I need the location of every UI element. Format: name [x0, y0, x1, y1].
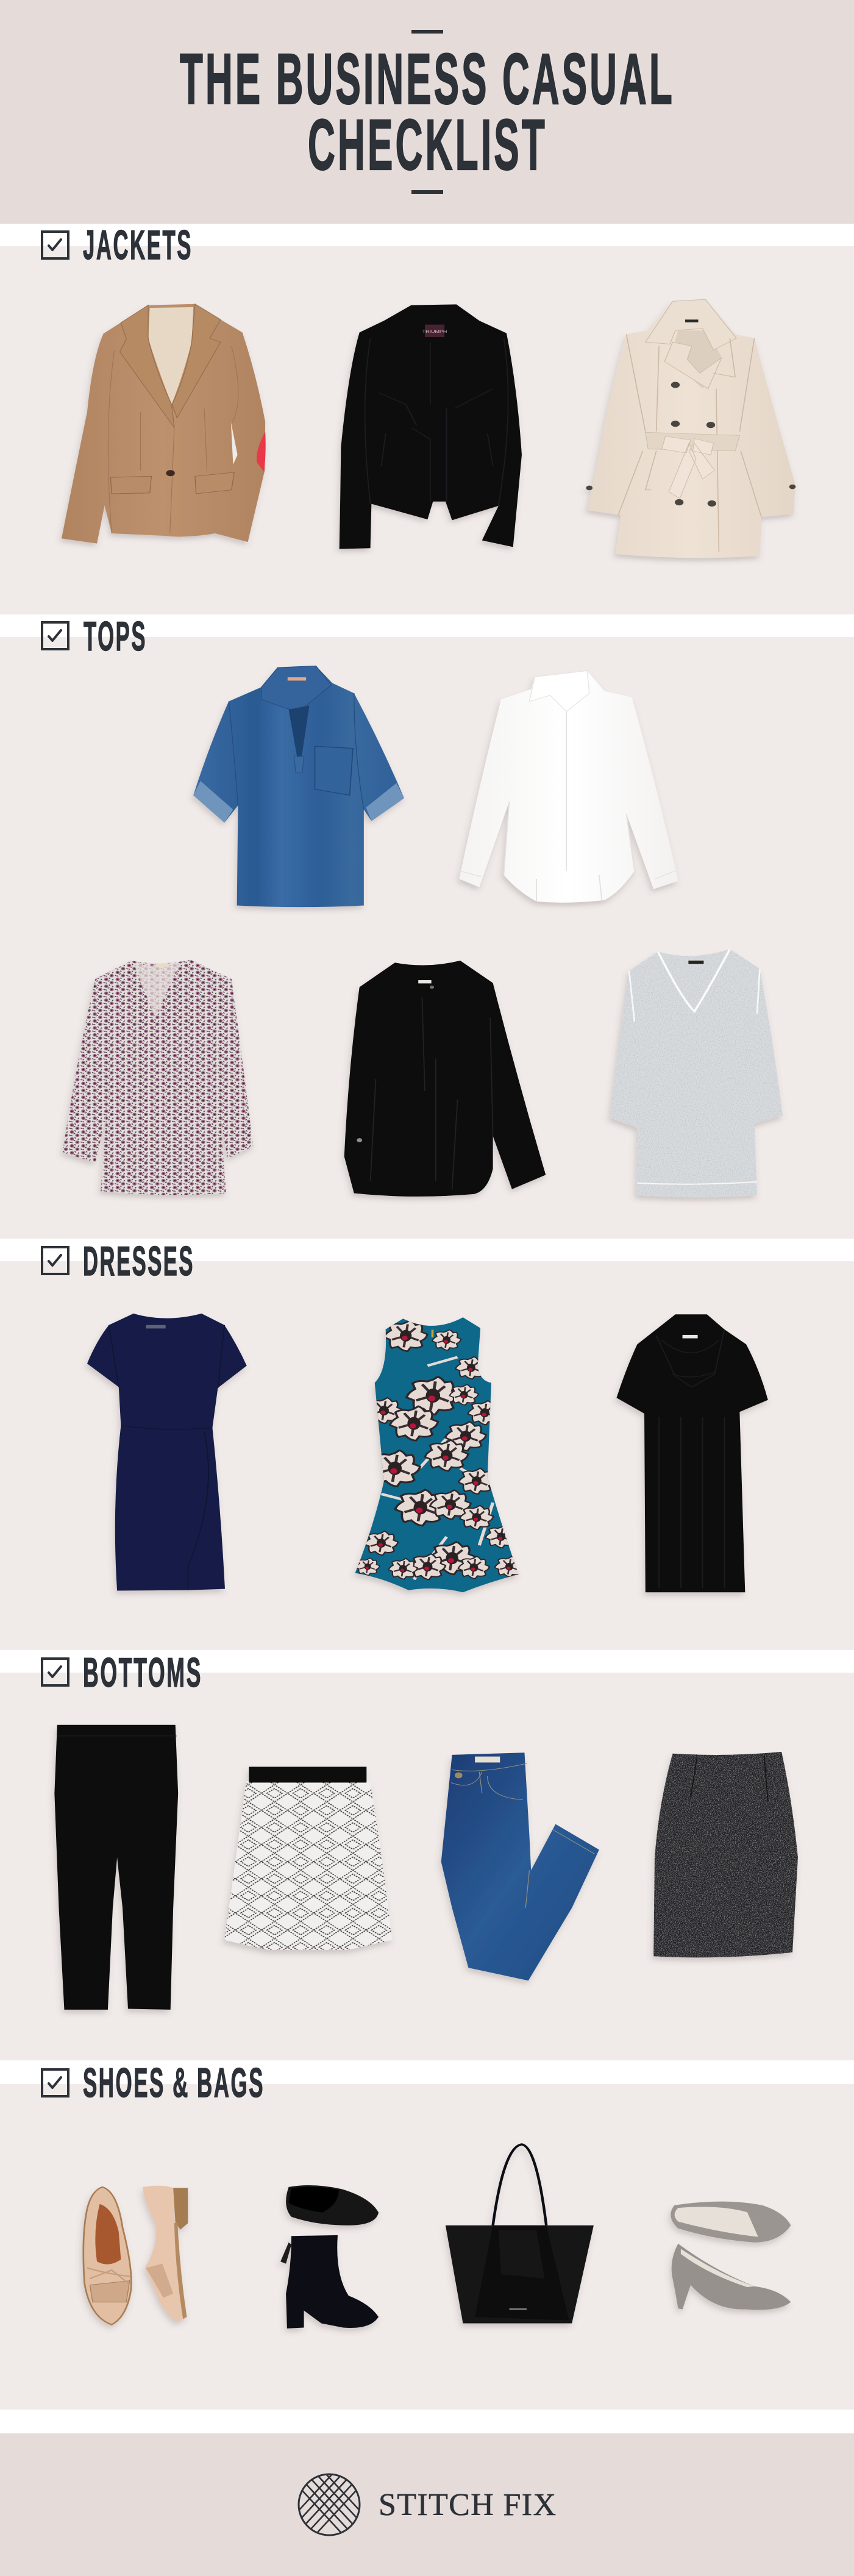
black trousers [54, 1725, 178, 2010]
trench coat [586, 299, 795, 558]
heading: bottoms [42, 1649, 202, 1696]
black drape jacket [340, 304, 522, 549]
floral blouse [63, 960, 253, 1195]
denim shirt [193, 666, 404, 907]
black blouse [344, 961, 546, 1197]
panel: shoes and bags [0, 2060, 854, 2410]
panel: tops [0, 613, 854, 1239]
charcoal tweed skirt [653, 1752, 798, 1957]
white blouse [459, 671, 678, 903]
grey linen sweater [610, 949, 783, 1197]
heading: shoes and bags [42, 2060, 265, 2106]
blue jeans [441, 1752, 599, 1980]
black drape jacket: TRIUMPH [422, 329, 447, 334]
heading: jackets [42, 222, 193, 268]
panel: bottoms [0, 1649, 854, 2060]
heading: tops: TOPS [84, 613, 147, 660]
black cowl dress [616, 1314, 768, 1592]
camel blazer [62, 304, 266, 544]
header banner [0, 0, 854, 224]
patterned skirt [224, 1767, 392, 1950]
title [180, 39, 675, 185]
wordmark: STITCH FIX [379, 2488, 556, 2522]
black booties [280, 2185, 379, 2329]
loafers [84, 2186, 188, 2325]
panel: dresses [0, 1238, 854, 1650]
heading: dresses [42, 1238, 194, 1284]
heading: shoes and bags: SHOES & BAGS [83, 2060, 265, 2106]
title: CHECKLIST [308, 105, 547, 185]
navy dress [87, 1314, 247, 1590]
black tote bag [446, 2144, 594, 2324]
footer banner [0, 2433, 854, 2576]
stitch fix logo [297, 2474, 361, 2536]
floral dress [355, 1317, 524, 1592]
heading: tops [42, 613, 147, 660]
heading: bottoms: BOTTOMS [83, 1649, 202, 1696]
heading: jackets: JACKETS [83, 222, 193, 268]
heading: dresses: DRESSES [83, 1238, 194, 1284]
panel: jackets [0, 222, 854, 614]
grey pumps [671, 2202, 791, 2310]
